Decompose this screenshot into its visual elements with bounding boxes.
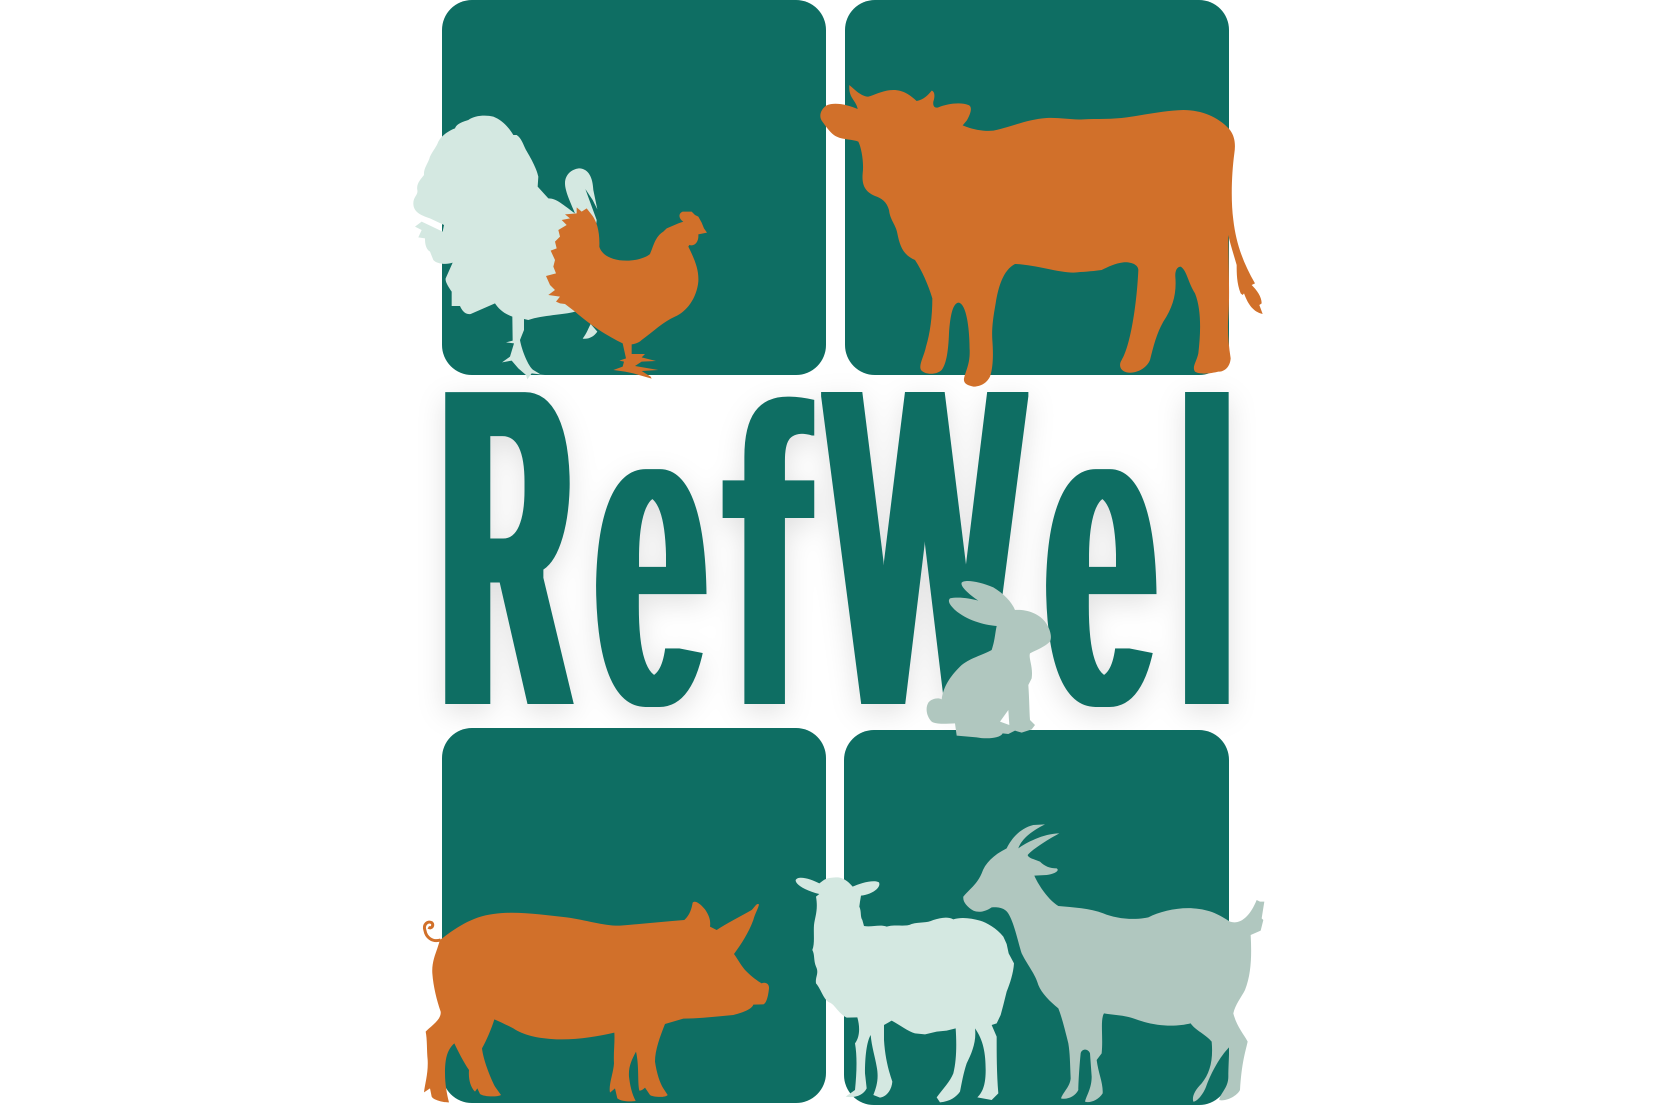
letter W: W <box>831 298 1020 798</box>
letter e: e <box>595 295 706 806</box>
icon: hen <box>546 207 707 379</box>
panel: top left <box>442 0 826 375</box>
icon: turkey <box>413 116 597 379</box>
icon: sheep <box>796 877 1014 1102</box>
letter R: R <box>444 288 569 807</box>
icon: rabbit <box>927 581 1051 738</box>
icon: cow <box>820 85 1263 387</box>
panel: bottom right <box>844 730 1229 1105</box>
letter e: e <box>1045 295 1156 806</box>
title: RefWel <box>444 288 1229 807</box>
panel: bottom left <box>442 728 826 1103</box>
icon: pig <box>424 902 769 1102</box>
panel: top right <box>845 0 1229 375</box>
letter f: f <box>719 318 816 796</box>
letter l: l <box>1185 318 1229 793</box>
icon: goat <box>963 824 1264 1102</box>
